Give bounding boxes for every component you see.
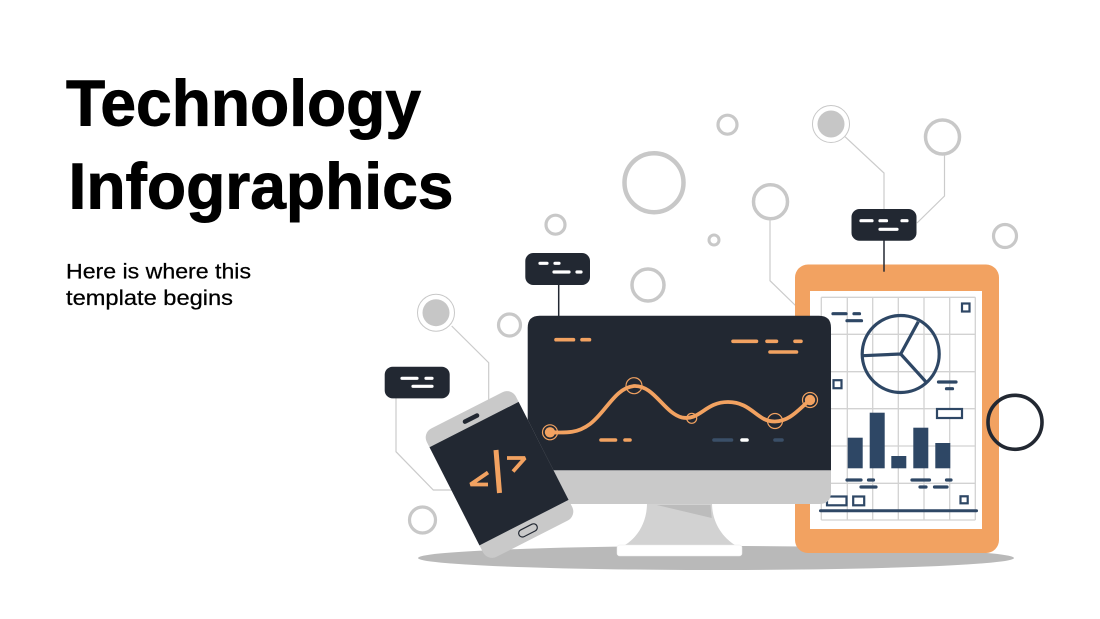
node: top gray dot <box>812 106 850 142</box>
chart boxes <box>827 304 970 505</box>
tablet <box>795 264 999 553</box>
chart labels <box>833 314 956 487</box>
subtitle: Here is where this <box>66 260 251 283</box>
connector lines <box>396 137 944 490</box>
chart markers <box>542 378 818 440</box>
floor shadow <box>418 546 1014 570</box>
grid <box>821 297 975 520</box>
callout: phone <box>385 367 450 398</box>
phone speaker <box>462 412 480 425</box>
title: Technology <box>66 67 421 140</box>
title: Infographics <box>68 149 454 222</box>
line chart <box>550 386 810 433</box>
subtitle: template begins <box>66 287 233 310</box>
icon: code symbol <box>470 450 525 493</box>
chart axis <box>820 509 976 512</box>
pie chart <box>862 316 939 392</box>
monitor stand <box>617 503 742 556</box>
smartphone <box>422 388 577 561</box>
phone home button <box>517 523 539 538</box>
screen legend <box>714 438 782 442</box>
node: left gray dot <box>418 294 454 331</box>
title <box>66 67 454 222</box>
callout: top right <box>852 209 916 272</box>
monitor <box>528 316 831 504</box>
black ring <box>988 395 1042 449</box>
decorative circles <box>410 115 1016 533</box>
bar chart <box>848 413 950 468</box>
callout: monitor <box>525 253 590 316</box>
screen labels <box>556 340 801 440</box>
subtitle <box>66 260 251 310</box>
